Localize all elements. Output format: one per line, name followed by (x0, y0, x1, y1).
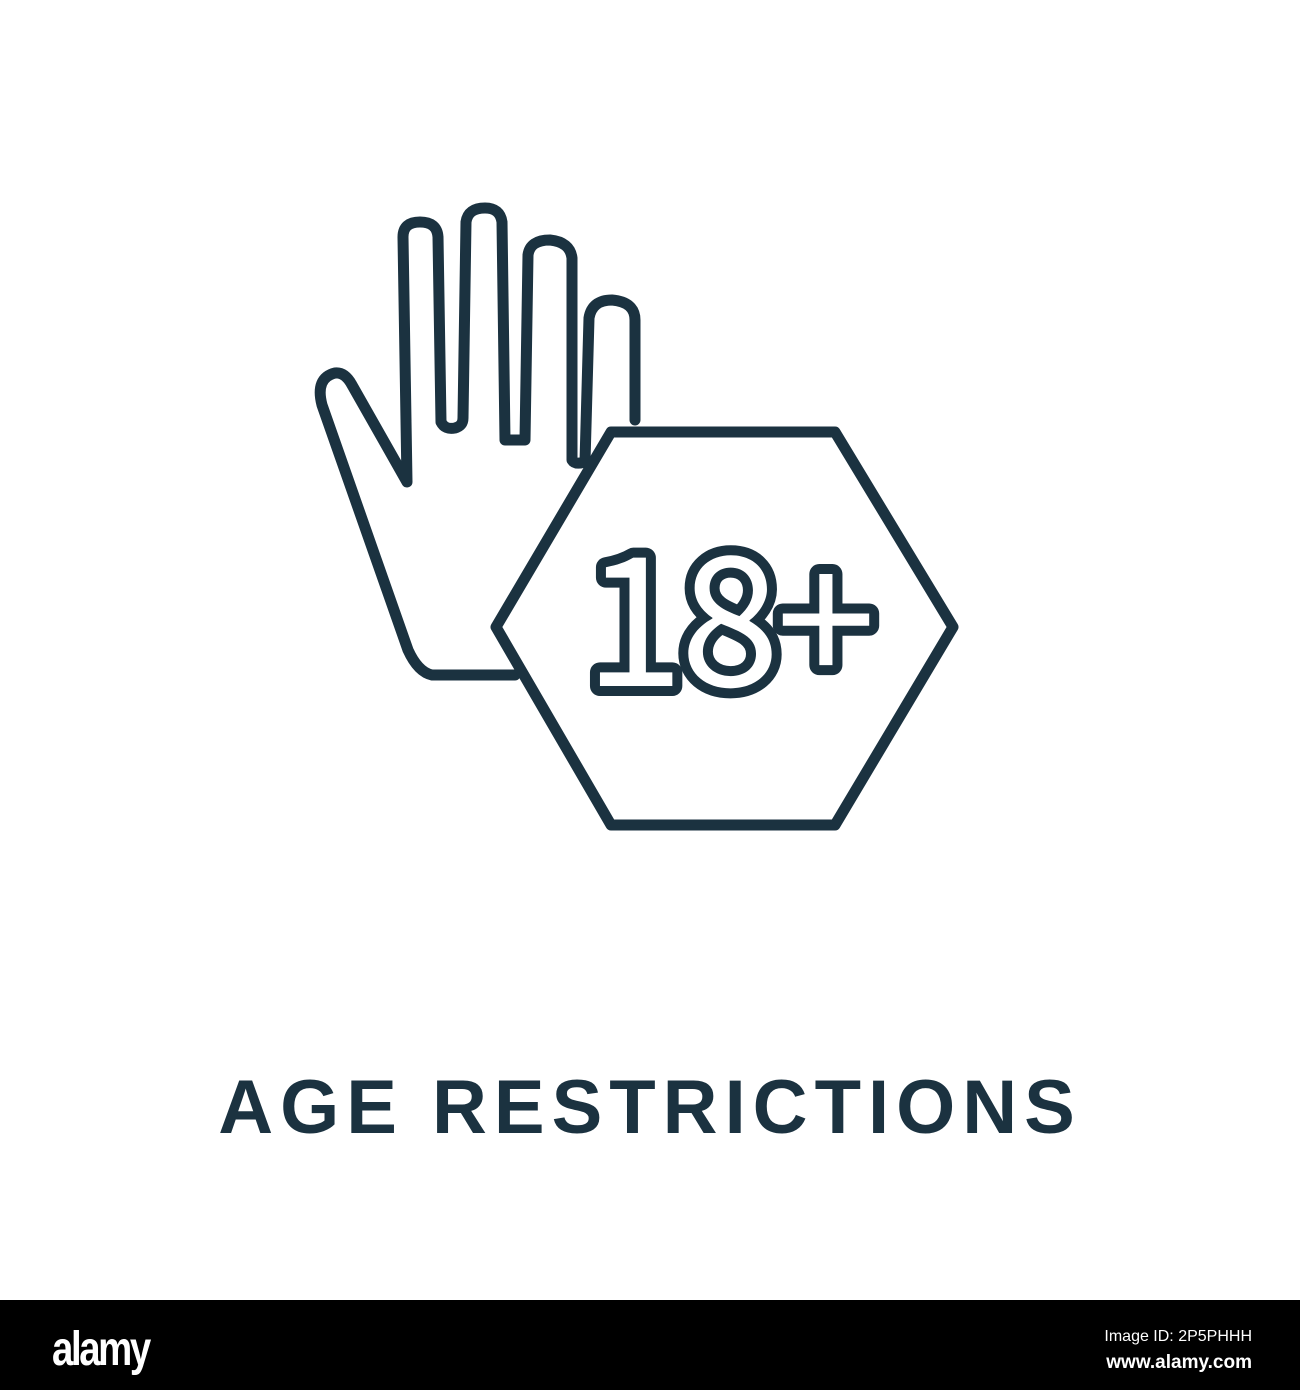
logo: alamy (52, 1323, 149, 1376)
image id (1104, 1328, 1252, 1373)
icon: hexagon (496, 432, 953, 825)
title: AGE RESTRICTIONS (218, 1065, 1082, 1150)
image id: Image ID: 2P5PHHH (1104, 1328, 1252, 1345)
icon: 18+ text: 18+ (584, 477, 872, 738)
image id: www.alamy.com (1106, 1352, 1252, 1373)
footer bar (0, 1300, 1300, 1390)
icon: hand (320, 208, 635, 675)
